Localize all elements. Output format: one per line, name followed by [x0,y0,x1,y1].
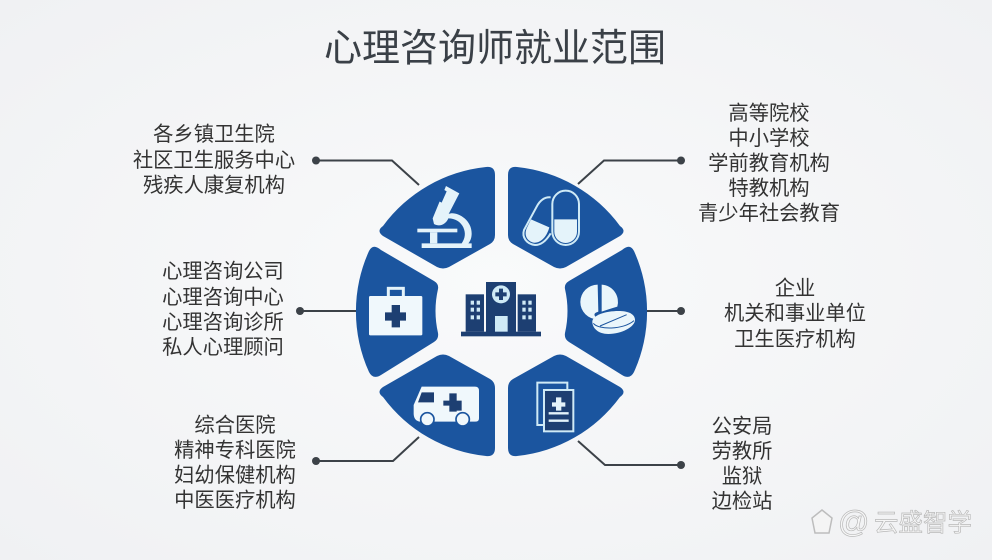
text block: bottom right: 边检站 [712,490,772,513]
text block: bottom left: 精神专科医院 [174,439,296,462]
text block: bottom right [712,415,772,513]
text block: middle left: 心理咨询公司 [162,260,284,283]
text block: middle right: 企业 [775,277,815,300]
text block: bottom right: 劳教所 [712,440,772,463]
icon: microscope [417,186,472,248]
text block: middle left: 私人心理顾问 [162,336,284,359]
text block: top right: 青少年社会教育 [698,202,840,225]
segment: left [356,247,438,377]
text block: top left [133,123,295,197]
icon: first aid kit [369,288,422,335]
text block: top right: 高等院校 [728,102,810,125]
text block: middle right [724,277,866,351]
icon: pills [580,285,635,334]
text block: bottom left: 妇幼保健机构 [174,464,296,487]
text block: middle left: 心理咨询诊所 [162,311,284,334]
icons [369,186,635,431]
segment: bottom left [380,354,495,456]
segment: top right [508,167,624,268]
text block: bottom left: 中医医疗机构 [174,489,296,512]
text block: top left: 各乡镇卫生院 [153,123,275,146]
connector lines [296,156,685,469]
text block: top right [698,102,840,225]
text block: bottom right: 公安局 [712,415,772,438]
title: 心理咨询师就业范围 [324,28,666,70]
watermark at sign: @ [838,504,869,539]
watermark icon [812,510,832,533]
text block: top right: 学前教育机构 [708,152,830,175]
text block: top right: 中小学校 [728,127,810,150]
text block: top left: 社区卫生服务中心 [133,149,295,172]
watermark [812,504,972,539]
segment: right [565,247,647,377]
watermark text: 云盛智学 [874,509,972,537]
icon: capsules [523,191,579,245]
segment: bottom right [508,354,624,456]
text block: middle right: 卫生医疗机构 [734,328,856,351]
text block: top left: 残疾人康复机构 [143,174,285,197]
text block: bottom right: 监狱 [722,465,762,488]
text block: bottom left [174,414,296,512]
text block: top right: 特教机构 [728,177,810,200]
segment: top left [380,167,495,268]
text block: middle right: 机关和事业单位 [724,302,866,325]
text block: middle left: 心理咨询中心 [162,286,284,309]
text block: bottom left: 综合医院 [194,414,276,437]
icon: hospital building [461,282,541,336]
text block: middle left [162,260,284,359]
icon: clipboard [537,383,573,431]
icon: ambulance [414,387,479,426]
